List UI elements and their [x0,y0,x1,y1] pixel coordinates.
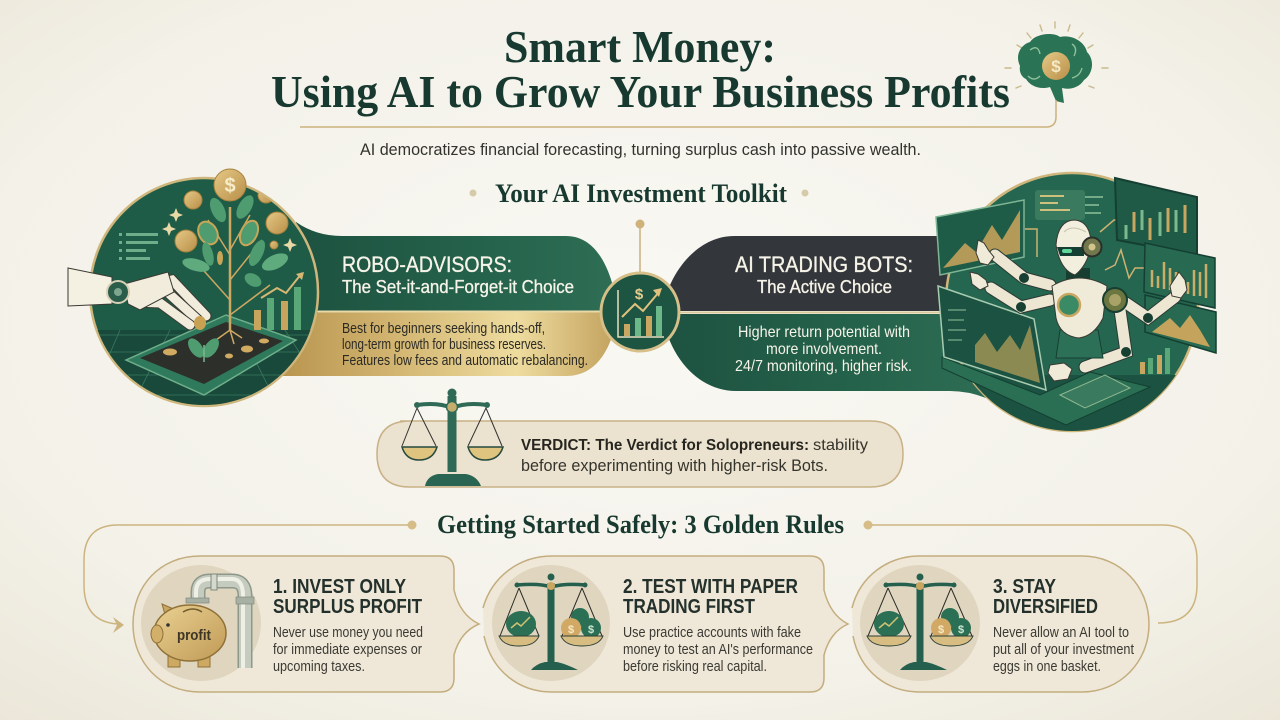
robo-advisors description: long-term growth for business reserves. [342,337,546,353]
icon: balance scale [402,388,503,486]
rule 3 heading: 3. STAY [993,576,1057,598]
rule 2 description: money to test an AI's performance [623,642,813,658]
verdict text: stability [813,437,868,454]
rule 2 heading [623,576,798,618]
panel: robo-advisors [280,222,618,376]
icon: piggy bank under pipe: profit [177,627,211,644]
panel: verdict [377,388,903,487]
rule 1 description: upcoming taxes. [273,659,365,675]
robo-advisors description [342,321,588,369]
subtitle: AI democratizes financial forecasting, turning surplus cash into passive wealth. [360,141,921,159]
screen: top left area chart [936,200,1024,275]
arrow: connector from rule 3 [864,520,1197,623]
rule 3 heading [993,576,1098,618]
AI trading bots description: 24/7 monitoring, higher risk. [735,358,912,375]
icon: balance scale with chart and coins [499,574,603,670]
icon: piggy bank under pipe [151,574,254,668]
rule 3 description: Never allow an AI tool to [993,625,1129,641]
AI trading bots description [735,324,912,375]
AI trading bots heading: AI TRADING BOTS: [735,252,913,277]
icon: center growth badge: $ [635,286,644,303]
icon: center growth badge [601,220,679,351]
rule 1 description [273,625,423,675]
icon: balance scale with diversified assets: $ [958,624,964,636]
illustration: robot hand planting money tree [68,169,330,410]
illustration: robot hand planting money tree: $ [224,175,236,197]
icon: balance scale with chart and coins: $ [588,624,594,636]
icon: balance scale with chart and coins: $ [568,624,574,636]
icon: balance scale with diversified assets [867,574,973,670]
AI trading bots description: more involvement. [766,341,882,358]
heading: toolkit: Your AI Investment Toolkit [495,179,787,208]
screen: lower right area chart [1145,295,1216,353]
title underline [300,100,1056,127]
rule 2 description: before risking real capital. [623,659,767,675]
robo-advisors description: Features low fees and automatic rebalancing. [342,353,588,369]
rule 3 description: put all of your investment [993,642,1134,658]
rule 1 heading: SURPLUS PROFIT [273,596,422,618]
panel: rule 3 [852,556,1149,692]
title: Smart Money: [504,21,776,72]
illustration: trading robot with chart screens [936,173,1216,435]
rule 1 description: Never use money you need [273,625,423,641]
verdict text: before experimenting with higher-risk Bots. [521,457,828,475]
rule 3 description: eggs in one basket. [993,659,1101,675]
panel: rule 1 [133,556,479,692]
AI trading bots heading [735,252,913,297]
rule 1 heading [273,576,422,618]
robo-advisors heading: The Set-it-and-Forget-it Choice [342,277,574,297]
icon: balance scale with diversified assets: $ [938,624,944,636]
rule 2 heading: TRADING FIRST [623,596,755,618]
panel: AI trading bots [662,236,1000,398]
robo-advisors heading [342,252,574,297]
rule 1 description: for immediate expenses or [273,642,422,658]
title: Using AI to Grow Your Business Profits [271,66,1010,117]
robo-advisors description: Best for beginners seeking hands-off, [342,321,545,337]
icon: AI brain with dollar coin [1005,22,1108,103]
rule 1 heading: 1. INVEST ONLY [273,576,407,598]
robot [970,220,1187,381]
AI trading bots heading: The Active Choice [757,277,892,297]
screen: laptop chart [938,286,1150,425]
rule 2 heading: 2. TEST WITH PAPER [623,576,798,598]
verdict text [521,437,868,475]
rule 2 description: Use practice accounts with fake [623,625,801,641]
icon: AI brain with dollar coin: $ [1051,57,1061,76]
title [271,21,1010,117]
heading: golden rules: Getting Started Safely: 3 Golden Rules [437,510,844,539]
arrow: connector to rule 1 [84,520,416,633]
AI trading bots description: Higher return potential with [738,324,910,341]
panel: rule 2 [483,556,848,692]
screen: bar chart [1144,243,1215,308]
rule 2 description [623,625,813,675]
robo-advisors heading: ROBO-ADVISORS: [342,252,512,277]
rule 3 description [993,625,1134,675]
rule 3 heading: DIVERSIFIED [993,596,1098,618]
verdict text: VERDICT: The Verdict for Solopreneurs: [521,437,809,454]
screen: candlestick chart [1115,178,1197,255]
